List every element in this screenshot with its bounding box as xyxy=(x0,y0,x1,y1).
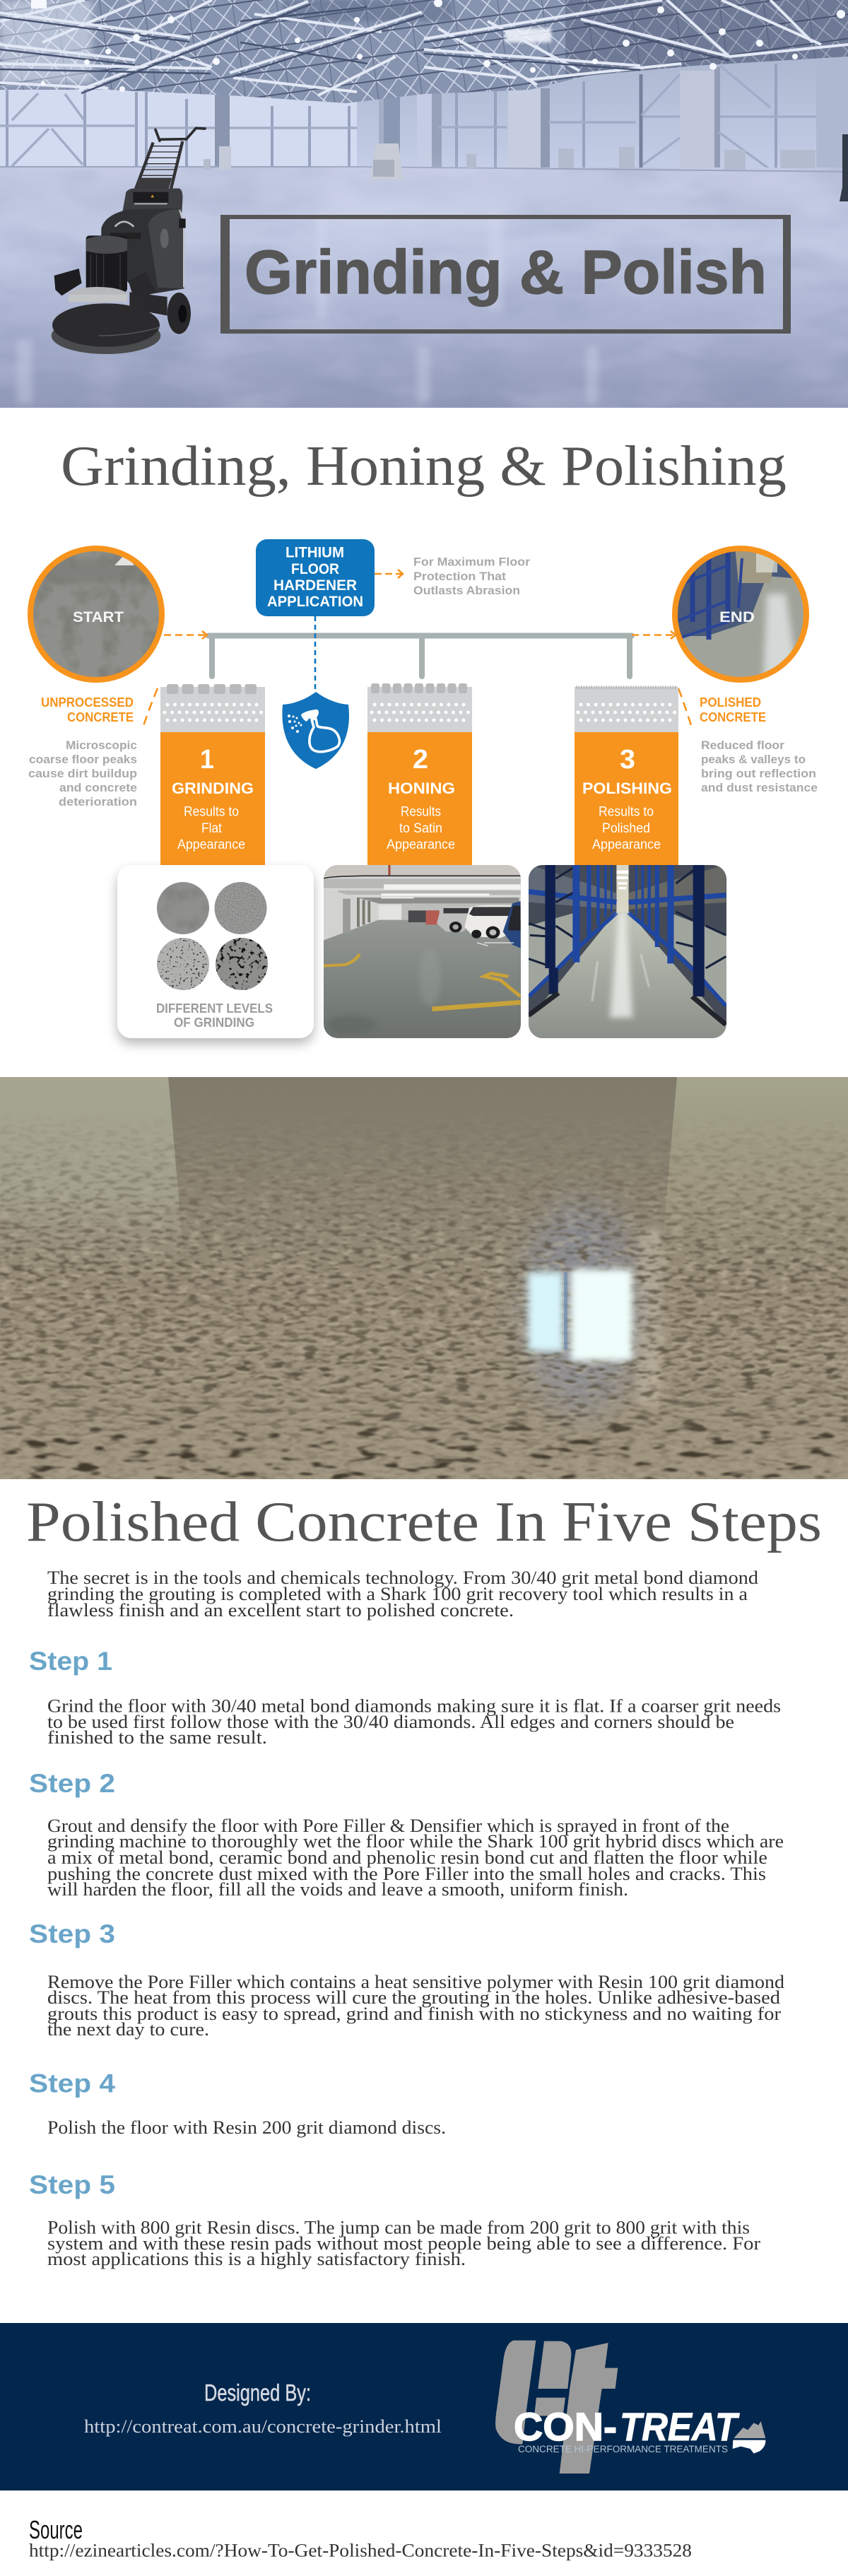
text block: step 3: grouts this product is easy to spread, grind and finish with no stickyness and no waiting for xyxy=(47,2004,781,2024)
column 2: honing: Appearance xyxy=(387,837,455,852)
text block: step 2: pushing the concrete dust mixed with the Pore Filler into the small holes and cracks. This xyxy=(47,1864,766,1884)
callout: unprocessed concrete: and concrete xyxy=(59,781,137,794)
text block: step 2: a mix of metal bond, ceramic bond and phenolic resin bond cut and flatten the floor while xyxy=(47,1847,767,1868)
hero title: Grinding & Polish xyxy=(245,238,767,307)
column 1: grinding: Appearance xyxy=(177,837,245,852)
note: floor protection: Outlasts Abrasion xyxy=(413,584,520,597)
callout: unprocessed concrete: UNPROCESSED xyxy=(41,695,134,710)
text block: step 1 xyxy=(47,1695,781,1748)
text block: step 3 xyxy=(47,1972,784,2040)
start label: START xyxy=(73,609,124,625)
text block: step 3: Remove the Pore Filler which contains a heat sensitive polymer with Resin 100 grit diamond xyxy=(47,1972,784,1992)
text block: step 1: Grind the floor with 30/40 metal bond diamonds making sure it is flat. If a coarser grit needs xyxy=(47,1695,781,1716)
designer url: http://contreat.com.au/concrete-grinder.html xyxy=(84,2416,442,2437)
column 3: polishing: Appearance xyxy=(592,837,661,852)
disc 3 xyxy=(157,938,209,990)
source url: http://ezinearticles.com/?How-To-Get-Polished-Concrete-In-Five-Steps&id=9333528 xyxy=(29,2540,692,2561)
text block: step 5: most applications this is a highly satisfactory finish. xyxy=(47,2249,466,2269)
text block: introduction: grinding the grouting is completed with a Shark 100 grit recovery tool which results in a xyxy=(47,1584,748,1604)
callout: unprocessed concrete xyxy=(28,695,137,808)
text block: step 5 xyxy=(47,2218,760,2269)
column 1: grinding xyxy=(160,684,265,865)
lithium hardener box: LITHIUM xyxy=(285,544,344,561)
callout: polished concrete: POLISHED xyxy=(700,695,761,710)
text block: step 2: Grout and densify the floor with Pore Filler & Densifier which is sprayed in front of the xyxy=(47,1816,729,1836)
panel: footer xyxy=(0,2323,848,2490)
text block: step 3: discs. The heat from this process will cure the grouting in the holes. Unlike adhesive-based xyxy=(47,1987,780,2008)
source label: Source xyxy=(29,2515,83,2544)
photo: polished warehouse aisle xyxy=(527,862,729,1041)
logo: con-treat xyxy=(495,2341,765,2474)
column 3: polishing xyxy=(575,687,678,865)
blue dashed line xyxy=(314,616,316,693)
lithium hardener box xyxy=(256,539,375,616)
callout: unprocessed concrete: coarse floor peaks xyxy=(29,753,137,766)
column 3: polishing: 3 xyxy=(620,745,635,775)
photo: polished concrete floor xyxy=(0,1077,848,1481)
text block: step 2: will harden the floor, fill all the voids and leave a smooth, uniform finish. xyxy=(47,1879,628,1900)
text block: step 5: Polish with 800 grit Resin discs. The jump can be made from 200 grit to 800 grit with this xyxy=(47,2218,750,2237)
text block: step 5: system and with these resin pads without most people being able to see a difference. For xyxy=(47,2233,760,2254)
column 3: polishing: Results to xyxy=(599,804,654,819)
icon: floor grinding machine xyxy=(52,128,205,354)
heading: step 3: Step 3 xyxy=(29,1919,115,1948)
callout: polished concrete xyxy=(700,695,818,794)
panel: process diagram xyxy=(28,539,818,1041)
text block: introduction xyxy=(47,1568,758,1621)
logo: con-treat: CON- xyxy=(514,2404,617,2449)
column 2: honing: HONING xyxy=(388,780,455,797)
note: floor protection: Protection That xyxy=(413,570,506,583)
designed by label: Designed By: xyxy=(204,2380,311,2406)
photo: honed parking garage xyxy=(322,862,523,1040)
text block: step 1: finished to the same result. xyxy=(47,1727,267,1748)
card caption: DIFFERENT LEVELS xyxy=(156,1001,273,1016)
heading: polished concrete in five steps: Polished Concrete In Five Steps xyxy=(26,1491,822,1553)
note: floor protection: For Maximum Floor xyxy=(413,555,530,569)
column 3: polishing: Polished xyxy=(602,821,650,836)
column 1: grinding: Results to xyxy=(184,804,239,819)
callout: polished concrete: peaks & valleys to xyxy=(701,753,806,766)
column 1: grinding: GRINDING xyxy=(172,780,254,797)
end label: END xyxy=(719,609,755,625)
panel: hero banner xyxy=(0,0,848,408)
callout: unprocessed concrete: cause dirt buildup xyxy=(28,767,137,780)
column 3: polishing: POLISHING xyxy=(582,780,672,797)
heading: step 5: Step 5 xyxy=(29,2170,115,2199)
disc 2 xyxy=(214,882,267,934)
logo: con-treat: CONCRETE HI-PERFORMANCE TREATMENTS xyxy=(518,2444,728,2454)
disc 4 xyxy=(216,938,268,990)
start circle xyxy=(28,546,164,682)
lithium hardener box: APPLICATION xyxy=(267,594,363,610)
hero warehouse photo xyxy=(0,0,848,408)
heading: step 2: Step 2 xyxy=(29,1769,115,1798)
text block: introduction: The secret is in the tools and chemicals technology. From 30/40 grit metal bond diamond xyxy=(47,1568,758,1588)
disc 1 xyxy=(157,882,209,934)
heading: grinding honing polishing: Grinding, Honing & Polishing xyxy=(61,435,787,498)
callout: polished concrete: bring out reflection xyxy=(701,767,816,780)
column 1: grinding: Flat xyxy=(201,821,223,836)
text block: step 2 xyxy=(47,1816,784,1900)
icon: shield with spray bottle xyxy=(282,692,349,769)
connector bar xyxy=(208,636,632,676)
lithium hardener box: HARDENER xyxy=(273,577,357,594)
callout: unprocessed concrete: CONCRETE xyxy=(67,710,134,724)
text block: step 2: grinding machine to thoroughly wet the floor while the Shark 100 grit hybrid discs which are xyxy=(47,1831,784,1852)
column 2: honing: 2 xyxy=(413,745,428,775)
text block: step 1: to be used first follow those with the 30/40 diamonds. All edges and corners should be xyxy=(47,1712,734,1732)
lithium hardener box: FLOOR xyxy=(291,561,339,577)
end circle xyxy=(673,546,809,682)
text block: introduction: flawless finish and an excellent start to polished concrete. xyxy=(47,1600,514,1621)
heading: step 1: Step 1 xyxy=(29,1647,112,1676)
card: levels of grinding xyxy=(117,865,314,1038)
note: floor protection xyxy=(413,555,530,597)
logo: con-treat: TREAT xyxy=(620,2404,740,2449)
column 2: honing xyxy=(367,683,472,865)
callout: polished concrete: and dust resistance xyxy=(701,781,818,794)
column 2: honing: to Satin xyxy=(399,821,442,836)
card caption: OF GRINDING xyxy=(174,1016,254,1030)
column 1: grinding: 1 xyxy=(200,745,214,775)
callout: polished concrete: CONCRETE xyxy=(700,710,766,724)
text block: step 3: the next day to cure. xyxy=(47,2019,209,2040)
heading: step 4: Step 4 xyxy=(29,2069,115,2098)
card caption xyxy=(156,1001,273,1030)
dashed arrows xyxy=(142,570,693,730)
callout: unprocessed concrete: deterioration xyxy=(59,795,137,808)
column 2: honing: Results xyxy=(401,804,441,819)
hero title frame xyxy=(220,215,791,334)
text block: step 4: Polish the floor with Resin 200 grit diamond discs. xyxy=(47,2117,446,2138)
callout: unprocessed concrete: Microscopic xyxy=(66,739,137,752)
callout: polished concrete: Reduced floor xyxy=(701,739,784,752)
